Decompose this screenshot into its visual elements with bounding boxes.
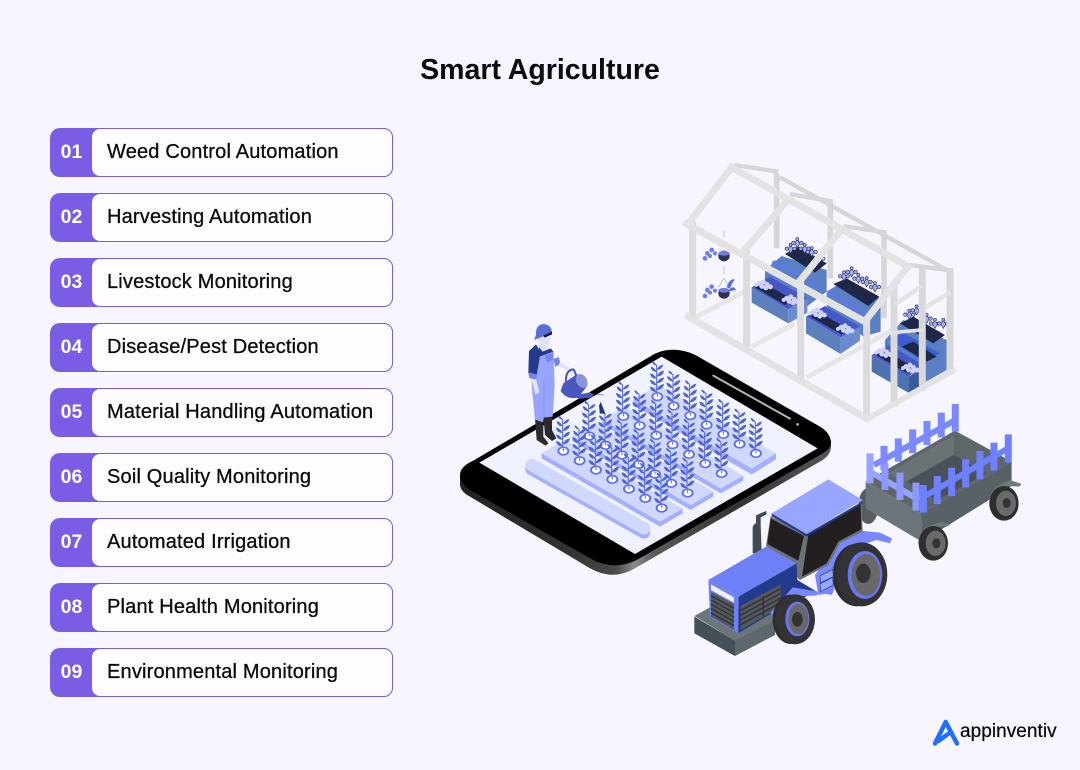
list item 08 xyxy=(50,583,393,632)
planter back left xyxy=(765,238,827,307)
sleeves and arms xyxy=(528,342,573,394)
trailer bed xyxy=(866,431,1012,542)
greenhouse front frame xyxy=(687,167,953,418)
list item 03 xyxy=(50,258,393,307)
side steps xyxy=(815,568,833,595)
greenhouse xyxy=(687,165,953,418)
phone front face xyxy=(460,350,831,565)
rear fender xyxy=(815,531,892,595)
front fender xyxy=(770,587,818,618)
phone side edge xyxy=(460,440,831,575)
list item 02: 02 xyxy=(61,206,82,228)
list item 06: 06 xyxy=(61,466,82,488)
list item 01 xyxy=(50,128,393,177)
list item 04: Disease/Pest Detection xyxy=(107,336,319,358)
trailer wheels xyxy=(917,480,1022,561)
list item 03: Livestock Monitoring xyxy=(107,271,293,293)
list item 07: 07 xyxy=(61,531,82,553)
title: Smart Agriculture xyxy=(420,54,660,86)
list item 09: 09 xyxy=(61,661,82,683)
front planting bar xyxy=(532,465,644,532)
overalls xyxy=(532,351,555,422)
hanging plant pots xyxy=(703,230,736,299)
planter front right xyxy=(872,345,923,393)
planter back middle xyxy=(827,267,881,337)
planter back right xyxy=(885,305,949,383)
head and cap xyxy=(534,324,552,347)
boots xyxy=(535,415,556,446)
plants xyxy=(556,361,763,513)
hood xyxy=(708,547,817,633)
phone screen xyxy=(479,357,818,554)
front wheel xyxy=(773,594,815,644)
list item 05: Material Handling Automation xyxy=(107,401,373,423)
cabin xyxy=(766,479,863,580)
appinventiv wordmark: appinventiv xyxy=(960,721,1057,742)
planter front middle xyxy=(806,306,860,354)
tractor base xyxy=(694,607,775,656)
list item 08: Plant Health Monitoring xyxy=(107,596,319,618)
tractor and trailer xyxy=(694,404,1022,656)
list item 06 xyxy=(50,453,393,502)
planting beds xyxy=(542,385,776,527)
list item 08: 08 xyxy=(61,596,82,618)
list item 03: 03 xyxy=(61,271,82,293)
list item 07: Automated Irrigation xyxy=(107,531,291,553)
list item 04: 04 xyxy=(61,336,82,358)
list item 06: Soil Quality Monitoring xyxy=(107,466,311,488)
list item 04 xyxy=(50,323,393,372)
list item 01: Weed Control Automation xyxy=(107,141,339,163)
farmer with watering can xyxy=(528,324,605,446)
rear wheel xyxy=(833,542,887,606)
exhaust pipe xyxy=(753,511,767,553)
list item 09 xyxy=(50,648,393,697)
list item 02: Harvesting Automation xyxy=(107,206,312,228)
trailer back fence xyxy=(870,404,957,511)
list item 01: 01 xyxy=(61,141,82,163)
list item 09: Environmental Monitoring xyxy=(107,661,338,683)
appinventiv logo mark xyxy=(935,722,957,744)
trailer front fence xyxy=(923,434,1010,513)
list item 02 xyxy=(50,193,393,242)
list item 05 xyxy=(50,388,393,437)
planter front left xyxy=(752,277,807,323)
trailer rear hidden wheel xyxy=(858,488,878,524)
list item 05: 05 xyxy=(61,401,82,423)
speaker and camera xyxy=(713,376,799,426)
greenhouse rear frame xyxy=(697,165,952,377)
list item 07 xyxy=(50,518,393,567)
smartphone xyxy=(460,350,831,575)
watering can xyxy=(561,369,605,413)
